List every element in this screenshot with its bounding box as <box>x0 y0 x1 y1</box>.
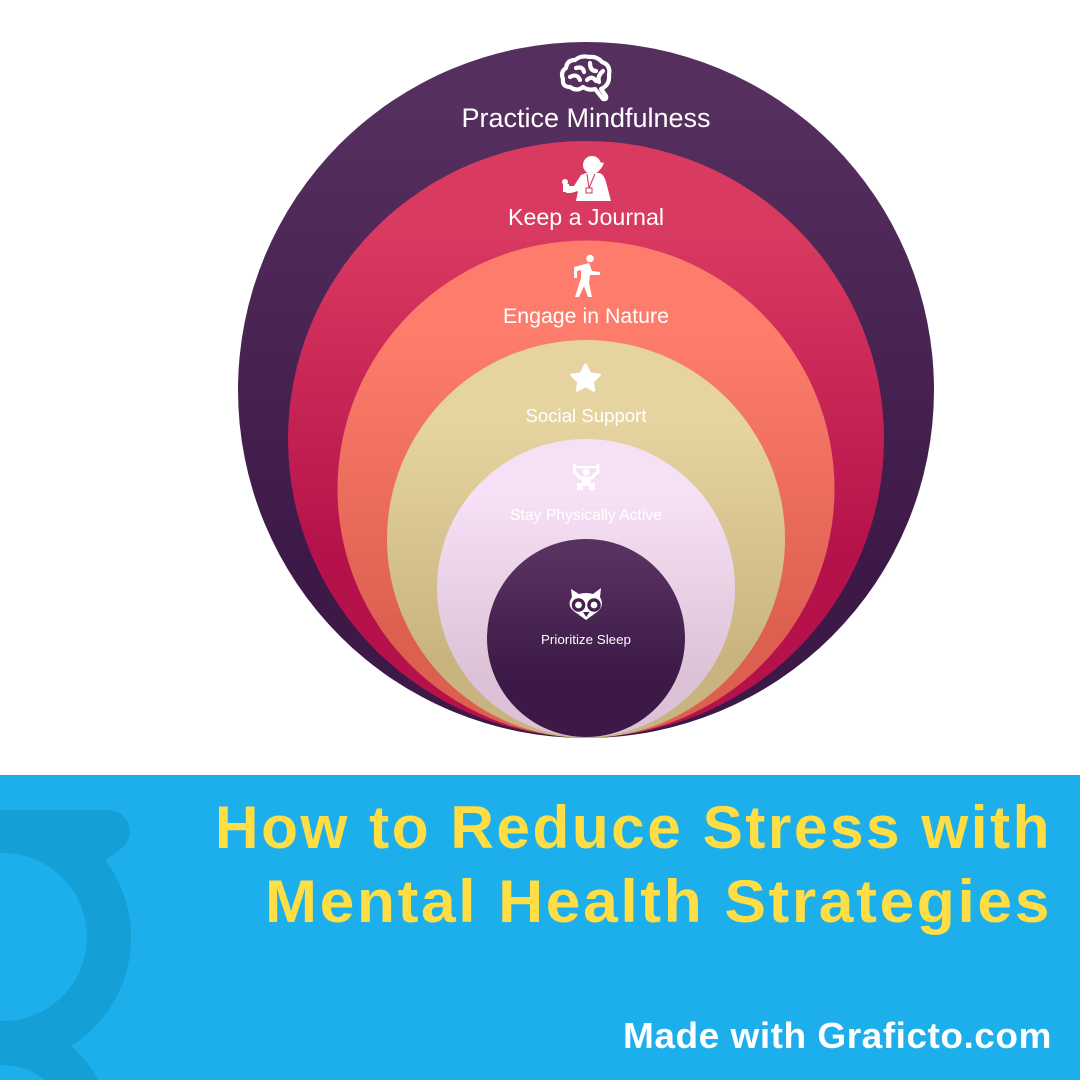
label: Prioritize Sleep <box>541 632 631 647</box>
label: Engage in Nature <box>503 305 669 328</box>
icon: walking figure <box>574 255 600 297</box>
layer: Social Support <box>387 340 785 738</box>
icon: brain <box>562 56 609 99</box>
footer credit: Made with Graficto.com <box>623 1015 1052 1056</box>
layer: Keep a Journal <box>288 141 884 737</box>
title: Mental Health Strategies <box>265 868 1052 935</box>
icon: owl <box>570 588 602 620</box>
layer: Practice Mindfulness <box>238 42 934 738</box>
label: Keep a Journal <box>508 204 664 230</box>
layer: Prioritize Sleep <box>487 539 685 737</box>
icon: star <box>572 364 600 390</box>
nested circles diagram <box>238 42 934 738</box>
banner <box>0 775 1080 1080</box>
icon: person with microphone <box>562 156 611 201</box>
label: Practice Mindfulness <box>462 103 710 133</box>
layer: Stay Physically Active <box>437 439 735 737</box>
label: Social Support <box>526 405 646 426</box>
label: Stay Physically Active <box>510 507 662 524</box>
icon: weightlifter <box>573 464 600 490</box>
logo watermark <box>0 810 131 1080</box>
title: How to Reduce Stress with <box>215 794 1052 861</box>
layer: Engage in Nature <box>338 240 834 738</box>
title <box>215 794 1052 935</box>
